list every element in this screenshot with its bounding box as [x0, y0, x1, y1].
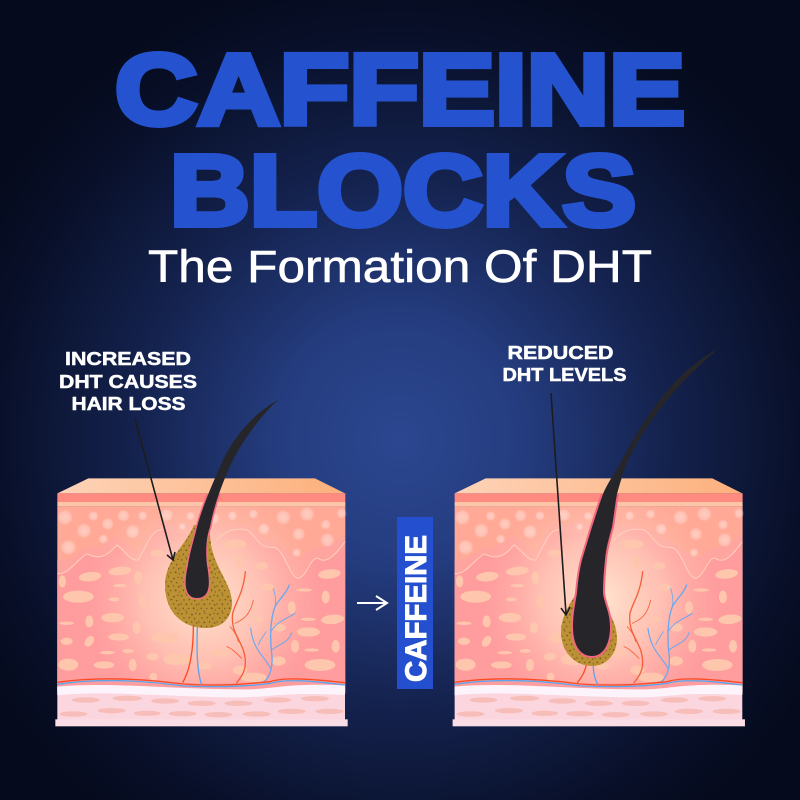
arrow: reduced callout to sac [551, 393, 570, 615]
vessels under follicle [577, 663, 598, 685]
icon: small gold DHT sac [561, 594, 617, 666]
subtitle: The Formation Of DHT [148, 241, 652, 292]
callout: increased DHT causes hair loss [59, 348, 197, 414]
icon: enlarged gold DHT sac [165, 525, 232, 628]
icon: short hair [186, 400, 278, 598]
callout: reduced DHT levels [502, 342, 626, 385]
panel: reduced DHT skin cross-section [453, 349, 745, 726]
callout: increased DHT causes hair loss: DHT CAUSES [59, 371, 197, 392]
vessels under follicle [183, 626, 202, 685]
panel: increased DHT skin cross-section [55, 400, 348, 726]
icon: hair sheath [571, 494, 619, 658]
callout: reduced DHT levels: DHT LEVELS [502, 364, 626, 385]
callout: increased DHT causes hair loss: INCREASED [65, 348, 191, 369]
arrow: increased callout to sac [135, 419, 175, 560]
callout: increased DHT causes hair loss: HAIR LOSS [72, 393, 186, 414]
caffeine label box: CAFFEINE [400, 535, 433, 682]
icon: hair sheath [184, 494, 220, 600]
callout: reduced DHT levels: REDUCED [508, 342, 614, 363]
icon: long hair [573, 349, 718, 656]
title: blocks: BLOCKS [170, 135, 636, 247]
title: caffeine: CAFFEINE [115, 34, 685, 146]
arrow: to caffeine [357, 596, 387, 610]
